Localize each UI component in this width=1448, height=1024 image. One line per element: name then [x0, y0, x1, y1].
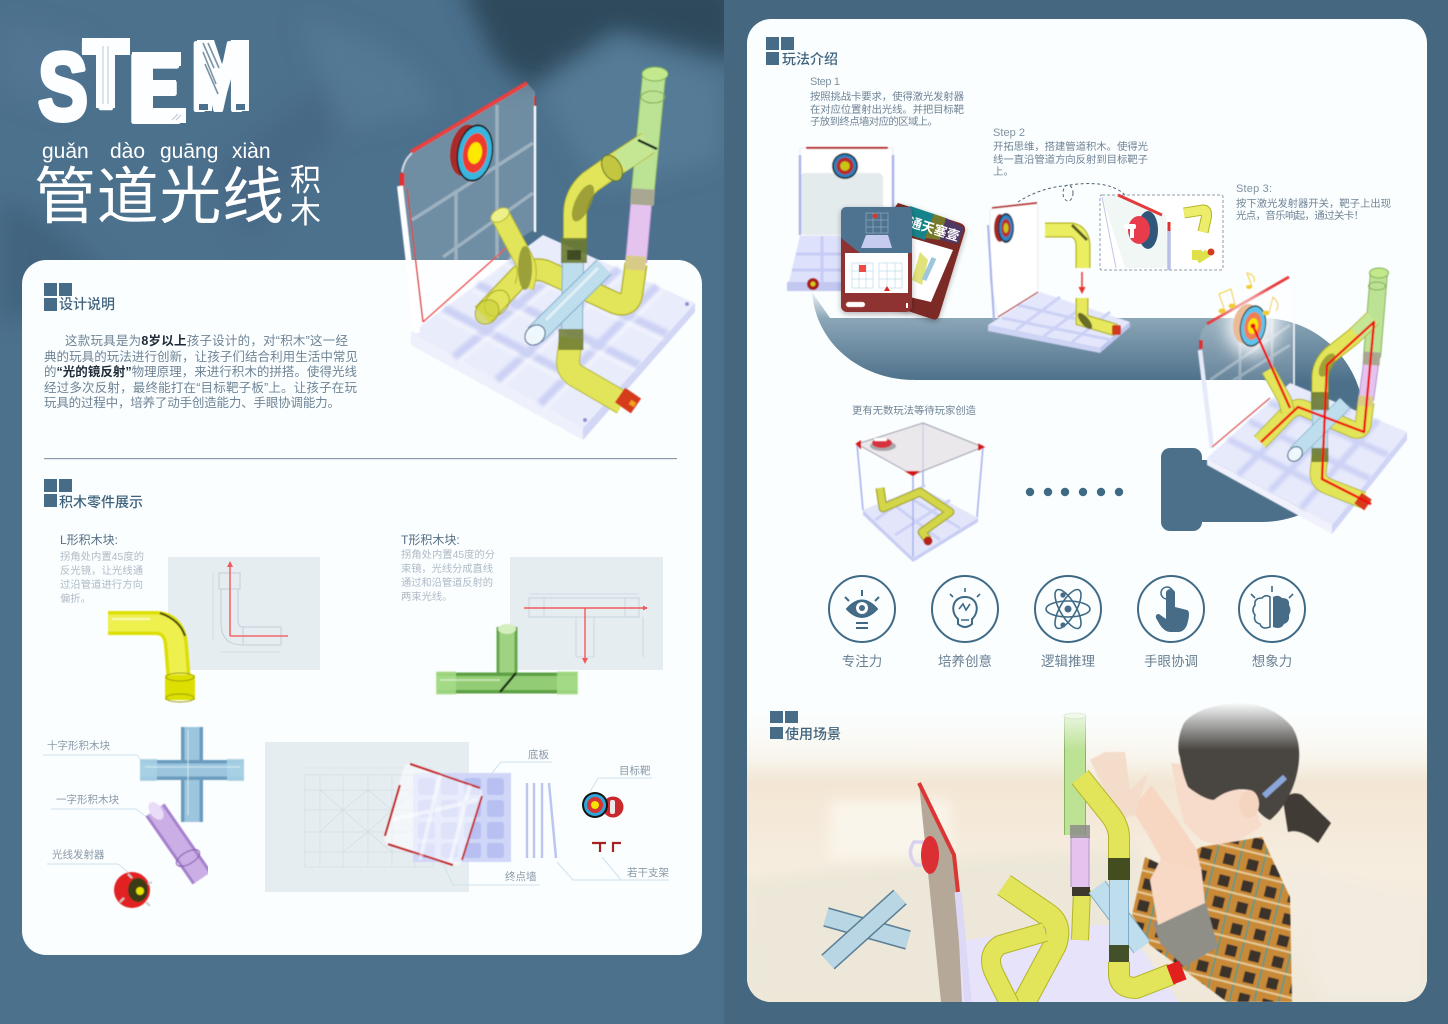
icon: hand eye coordination: [1138, 576, 1204, 642]
callout: cross block label: 十字形积木块: [47, 739, 110, 752]
heading: parts showcase: [44, 479, 143, 510]
text: more ways to play: 更有无数玩法等待玩家创造: [852, 404, 977, 417]
label: logic: 逻辑推理: [1041, 654, 1095, 669]
title: chinese product name: 木: [290, 195, 321, 230]
icon: creativity: [932, 576, 998, 642]
text: step 3: Step 3:: [1236, 183, 1272, 195]
text: step 2: 上。: [993, 166, 1014, 178]
callout: target label: 目标靶: [619, 764, 651, 777]
icon: logic atom: [1035, 576, 1101, 642]
text: design description paragraph: 典的玩具的玩法进行创新，让孩子们结合利用生活中常见: [44, 349, 358, 364]
heading: gameplay: [766, 37, 838, 67]
board: [1207, 383, 1407, 534]
photo: usage scene: [747, 690, 1427, 1010]
illustration: support rods: [527, 783, 556, 858]
text: L block: 反光镜，让光线通: [60, 564, 143, 577]
icon: focus: [829, 576, 895, 642]
board: [939, 925, 1179, 1002]
title: chinese product name: 积: [290, 163, 321, 198]
text: L block: 过沿管道进行方向: [60, 578, 143, 591]
heading: gameplay: 玩法介绍: [782, 51, 838, 67]
title: STEM: T: [83, 22, 129, 129]
illustration: challenge card back: 通天塞壹: [907, 215, 961, 244]
illustration: blue cross block: [140, 727, 244, 822]
illustration: cube variation: [857, 423, 983, 562]
arrow: dashed path to zoom box: [1018, 184, 1125, 202]
callout: brackets label: [557, 857, 669, 880]
target: [445, 120, 498, 185]
illustration: purple straight block: [145, 799, 202, 878]
text: T block: 通过和沿管道反射的: [401, 576, 493, 589]
wall: [1200, 277, 1294, 448]
icon: imagination brain: [1239, 576, 1305, 642]
text: step 2: Step 2: [993, 127, 1025, 139]
illustration: challenge card front: [841, 207, 912, 312]
heading: usage scene: 使用场景: [785, 726, 841, 742]
heading: usage scene: [770, 711, 841, 742]
text: design description paragraph: 的“光的镜反射”物理原理，来进行积木的拼搭。使得光线: [44, 364, 357, 379]
glowing target: [1222, 292, 1284, 360]
blueprint: L block: [168, 557, 320, 670]
callout: base label: [492, 748, 552, 773]
illustration: base board with end wall: [385, 764, 511, 865]
text: L block: [60, 533, 144, 605]
title: pinyin: [42, 140, 271, 163]
callout: base label: 底板: [528, 748, 549, 761]
illustration: laser emitter: [114, 872, 152, 908]
text: step 1: [810, 76, 965, 128]
title: STEM: [38, 22, 249, 142]
callout: emitter label: 光线发射器: [52, 848, 105, 861]
illustration: hero product: [400, 67, 695, 440]
text: T block: [401, 533, 495, 603]
text: step 2: 开拓思维，搭建管道积木。使得光: [993, 140, 1148, 153]
tubes: [470, 67, 668, 406]
heading: design description: 设计说明: [59, 296, 115, 312]
text: design description paragraph: 经过多次反射，最终能打在“目标靶子板”上。让孩子在玩: [44, 380, 357, 395]
title: pinyin: dào: [110, 140, 145, 163]
text: L block: 偏折。: [60, 592, 91, 605]
callout: straight block label: [51, 793, 148, 818]
text: step 3: 光点，音乐响起，通过关卡！: [1236, 209, 1364, 222]
callout: straight block label: 一字形积木块: [56, 793, 119, 806]
title: STEM: E: [128, 35, 182, 142]
illustration: brackets: [592, 843, 621, 852]
blue cross: [826, 897, 908, 962]
label: imagination: 想象力: [1252, 654, 1292, 669]
girl: [1090, 703, 1331, 1002]
blurred photo background: [0, 0, 740, 1024]
illustration: step 1 scene: [787, 148, 893, 291]
text: T block: 两束光线。: [401, 590, 452, 603]
heading: design description: [44, 283, 115, 312]
panel: right white card: [747, 19, 1427, 1002]
wall: [400, 83, 535, 333]
title: chinese product name: 管道光线: [34, 163, 284, 232]
text: step 3: 按下激光发射器开关，靶子上出现: [1236, 197, 1391, 210]
heading: parts showcase: 积木零件展示: [59, 494, 143, 510]
text: step 2: 线一直沿管道方向反射到目标靶子: [993, 153, 1148, 166]
illustration: challenge card back: [870, 203, 965, 320]
label: hand eye coordination: 手眼协调: [1144, 654, 1198, 669]
label: creativity: 培养创意: [938, 653, 992, 669]
callout: end wall label: [443, 863, 540, 885]
title: STEM: M: [191, 24, 245, 131]
music notes: [1218, 273, 1278, 316]
text: step 1: 在对应位置射出光线。并把目标靶: [810, 103, 964, 116]
text: L block: L形积木块:: [60, 533, 118, 547]
illustration: step 2 scene: [988, 203, 1130, 353]
tubes: [1064, 715, 1086, 835]
tubes: [1260, 268, 1388, 505]
text: step 1: 按照挑战卡要求，使得激光发射器: [810, 90, 965, 103]
callout: target label: [590, 764, 652, 792]
text: step 1: Step 1: [810, 76, 840, 88]
text: design description paragraph: [44, 333, 358, 410]
text: T block: 拐角处内置45度的分: [401, 548, 495, 561]
illustration: yellow L block: [108, 613, 194, 702]
dots: ellipsis: [1026, 488, 1123, 496]
text: T block: T形积木块:: [401, 533, 460, 547]
text: design description paragraph: 这款玩具是为8岁以上孩子设计的，对“积木”这一经: [65, 333, 348, 348]
title: STEM: S: [38, 34, 88, 141]
label: focus: 专注力: [842, 654, 882, 669]
text: step 2: [993, 127, 1148, 178]
illustration: green T block: [436, 624, 578, 692]
title: pinyin: xiàn: [232, 140, 271, 163]
illustration: step 2 zoom box: [1100, 195, 1223, 270]
callout: cross block label: [43, 739, 143, 763]
text: T block: 束镜，光线分成直线: [401, 562, 493, 575]
callout: brackets label: 若干支架: [627, 866, 669, 879]
callout: emitter label: [47, 848, 128, 872]
title: pinyin: guǎn: [42, 140, 89, 163]
panel: left white card: [22, 260, 702, 955]
illustration: step 3 scene: [1200, 268, 1407, 534]
laser beam: [1253, 322, 1374, 504]
decoration: S-shaped flow band: [812, 292, 1364, 531]
illustration: small target parts: [582, 792, 624, 818]
blueprint: base board: [265, 742, 469, 892]
board: [411, 235, 695, 440]
text: step 3: [1236, 183, 1391, 222]
blueprint: T block: [510, 557, 663, 670]
wall: [919, 783, 962, 1002]
title: pinyin: guāng: [160, 140, 218, 163]
text: L block: 拐角处内置45度的: [60, 550, 144, 563]
text: design description paragraph: 玩具的过程中，培养了动手创造能力、手眼协调能力。: [44, 395, 340, 410]
text: step 1: 子放到终点墙对应的区域上。: [810, 115, 938, 128]
callout: end wall label: 终点墙: [505, 870, 537, 883]
